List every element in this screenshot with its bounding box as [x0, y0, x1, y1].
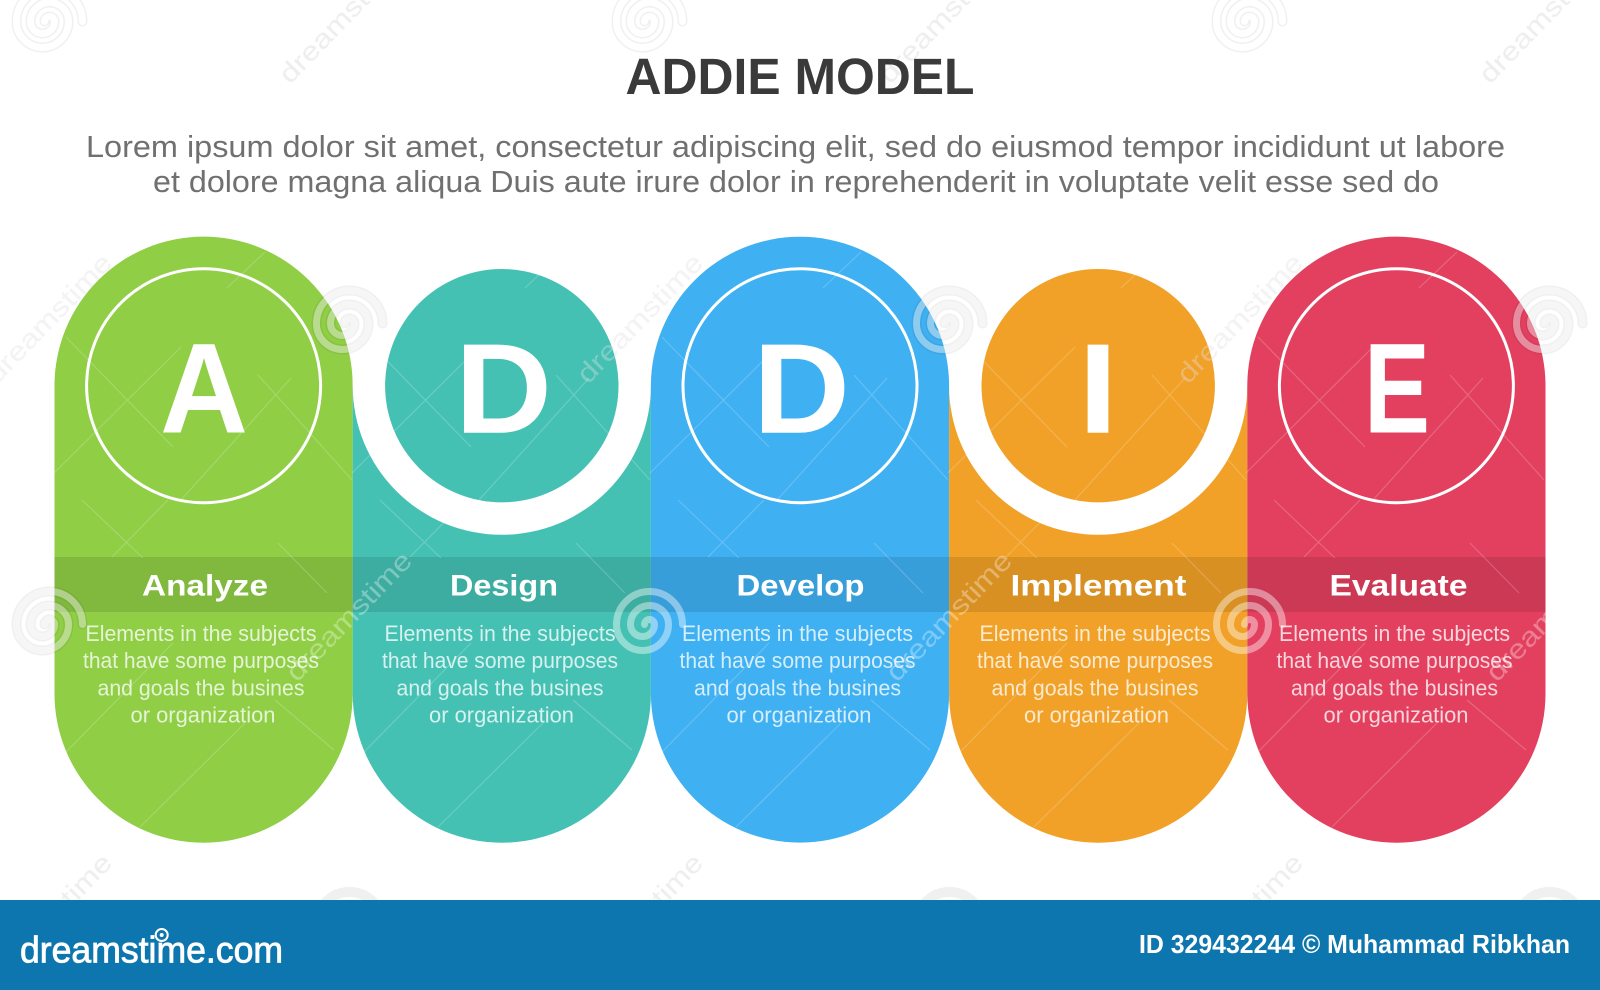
watermark: diagonal text on white: dreamstime	[1171, 247, 1309, 389]
watermark: diagonal text over panels	[0, 247, 1600, 687]
description: Design	[382, 621, 618, 728]
description: Evaluate	[1276, 621, 1512, 728]
watermark: diagonal text on white: dreamstime	[571, 847, 709, 989]
footer logo: dreamstime.com	[20, 930, 283, 970]
watermark: diagonal text on white: dreamstime	[1171, 847, 1309, 989]
circle: Develop ring	[683, 269, 917, 503]
panel: Evaluate pill	[1247, 237, 1546, 843]
description: Implement: that have some purposes	[977, 648, 1213, 673]
circle: Implement disc	[981, 269, 1215, 502]
big letters: E	[1364, 318, 1430, 461]
subtitle: et dolore magna aliqua Duis aute irure dolor in reprehenderit in voluptate velit esse sed do	[153, 164, 1439, 199]
title: ADDIE MODEL	[626, 48, 974, 105]
footer bar	[0, 900, 1600, 990]
description: Develop	[680, 621, 916, 728]
big letters: I	[1078, 318, 1118, 461]
circle: Design disc	[385, 269, 618, 502]
step labels: Develop	[736, 570, 864, 602]
description: Analyze: and goals the busines	[98, 676, 304, 700]
description: Analyze: Elements in the subjects	[86, 621, 316, 646]
big letters	[160, 318, 1430, 461]
big letters: A	[160, 318, 248, 461]
big letters: D	[753, 318, 850, 461]
description: Design: or organization	[429, 702, 574, 728]
label band	[54, 557, 1546, 612]
description: Evaluate: and goals the busines	[1291, 676, 1498, 700]
description: Develop: or organization	[726, 702, 872, 728]
description: Design: Elements in the subjects	[384, 621, 616, 646]
watermark: spiral centres hollowed on white	[16, 0, 1582, 650]
panel: Design pill	[353, 237, 651, 843]
circle: Analyze ring	[87, 269, 321, 503]
panel: Analyze pill	[54, 237, 353, 843]
step labels: Implement	[1010, 570, 1187, 602]
description: Develop: that have some purposes	[680, 648, 916, 673]
panel: Develop pill	[651, 237, 949, 843]
description: Analyze: or organization	[130, 702, 276, 728]
description: Evaluate: Elements in the subjects	[1279, 621, 1510, 646]
description: Analyze: that have some purposes	[83, 648, 319, 673]
description: Implement	[977, 621, 1213, 728]
watermark: diagonal lines over panels	[54, 252, 1544, 827]
description: Implement: or organization	[1024, 702, 1169, 728]
description: Implement: Elements in the subjects	[980, 621, 1210, 646]
subtitle: Lorem ipsum dolor sit amet, consectetur adipiscing elit, sed do eiusmod tempor incididunt ut labore	[86, 129, 1505, 164]
step labels	[142, 570, 1468, 602]
watermark: diagonal text over panels: dreamstime	[280, 545, 418, 687]
panel: Implement pill	[949, 237, 1247, 843]
description: Develop: and goals the busines	[694, 676, 901, 700]
watermark: diagonal text over panels: dreamstime	[880, 545, 1018, 687]
subtitle	[86, 129, 1505, 199]
big letters: D	[455, 318, 552, 461]
step labels: Evaluate	[1330, 570, 1468, 602]
footer credit: ID 329432244 © Muhammad Ribkhan	[1139, 929, 1570, 959]
description: Implement: and goals the busines	[992, 676, 1198, 700]
circle: Evaluate ring	[1279, 269, 1513, 503]
watermark: diagonal text over panels: dreamstime	[571, 247, 709, 389]
description: Develop: Elements in the subjects	[682, 621, 913, 646]
step labels: Design	[450, 570, 558, 602]
watermark: diagonal text over panels: dreamstime	[1171, 247, 1309, 389]
watermark: diagonal text on white: dreamstime	[571, 247, 709, 389]
description: Analyze	[83, 621, 319, 728]
description: Evaluate: that have some purposes	[1276, 648, 1512, 673]
step labels: Analyze	[142, 570, 268, 602]
description: Evaluate: or organization	[1324, 702, 1468, 728]
description: Design: and goals the busines	[396, 676, 604, 700]
watermark: diagonal text over panels: dreamstime	[1480, 545, 1600, 687]
description: Design: that have some purposes	[382, 648, 618, 673]
